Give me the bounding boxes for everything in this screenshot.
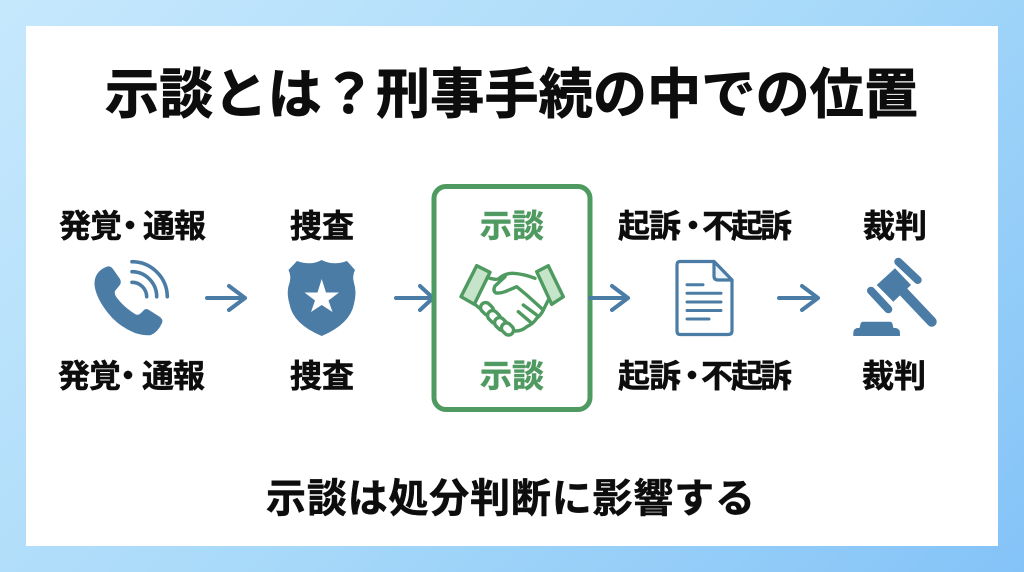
label bottom: 起訴・不起訴: 起訴・不起訴 (618, 358, 792, 394)
label bottom: 裁判: 裁判 (862, 358, 926, 394)
label top: 裁判: 裁判 (863, 208, 927, 244)
icon: handshake (461, 266, 563, 337)
icon: police badge (288, 260, 356, 336)
caption: 示談は処分判断に影響する (266, 477, 755, 521)
arrow: report to investigation (207, 286, 245, 310)
arrow: indictment to trial (779, 286, 818, 310)
label top: 示談: 示談 (480, 208, 544, 244)
label bottom: 発覚・通報: 発覚・通報 (58, 358, 205, 394)
label bottom: 示談: 示談 (480, 358, 544, 394)
icon: document (677, 262, 732, 334)
title: 示談とは？刑事手続の中での位置 (105, 65, 918, 125)
label top: 起訴・不起訴: 起訴・不起訴 (618, 208, 792, 244)
arrow: settlement to indictment (590, 286, 628, 310)
label top: 発覚・通報: 発覚・通報 (59, 208, 206, 244)
label bottom: 捜査: 捜査 (290, 358, 354, 394)
highlight box: settlement (434, 186, 590, 410)
icon: gavel (853, 262, 932, 336)
arrow: investigation to settlement (396, 286, 433, 310)
label top: 捜査: 捜査 (290, 208, 354, 244)
icon: phone (94, 262, 167, 335)
